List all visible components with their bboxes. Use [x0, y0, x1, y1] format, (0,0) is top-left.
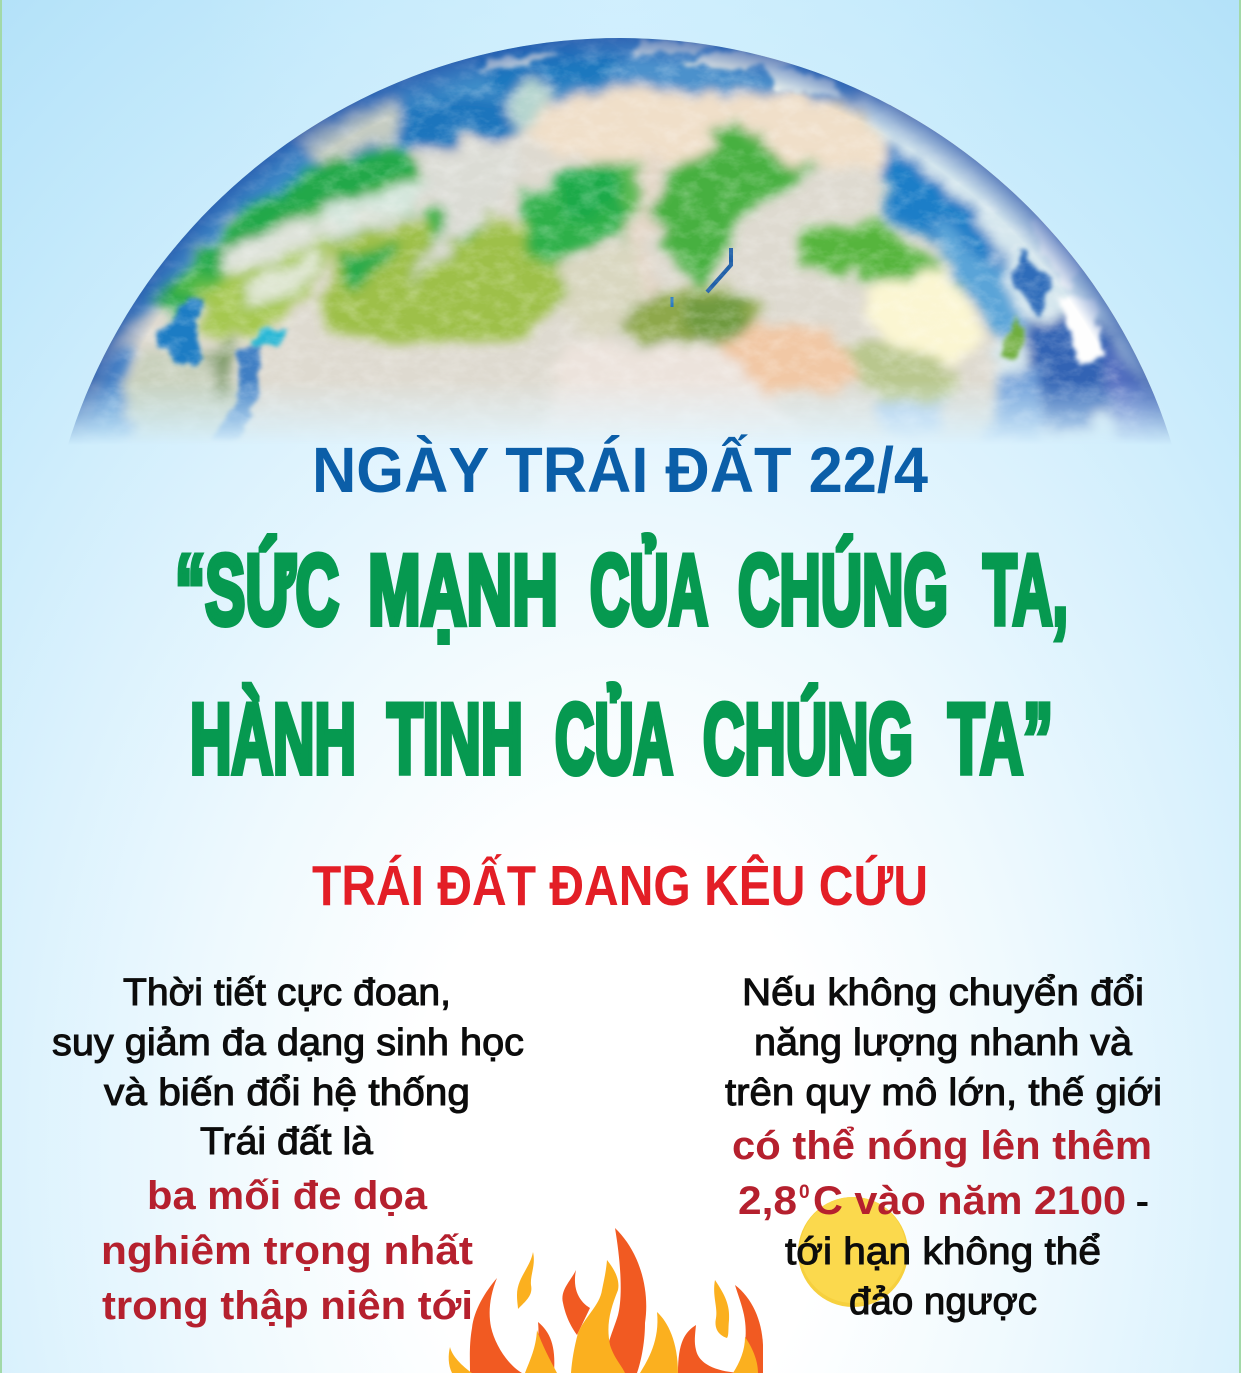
text block: left column: Thời tiết cực đoan,: [123, 972, 451, 1014]
title: slogan: “SỨC: [175, 534, 339, 645]
ocean and rim bands: [72, 38, 885, 434]
text block: left column: và biến đổi hệ thống: [104, 1072, 470, 1114]
text block: left column: [52, 972, 524, 1328]
title: slogan: CHÚNG: [738, 534, 948, 645]
text block: right column: năng lượng nhanh và: [754, 1022, 1133, 1064]
subheading: TRÁI ĐẤT ĐANG KÊU CỨU: [312, 853, 928, 918]
title: slogan: TINH: [387, 683, 523, 794]
text block: right column: C vào năm 2100: [813, 1179, 1126, 1223]
heading: date: NGÀY TRÁI ĐẤT 22/4: [312, 434, 928, 506]
lake: [707, 248, 731, 292]
globe illustration: [70, 38, 1170, 442]
seas and fine clouds: [156, 298, 205, 368]
right ocean and clouds: [856, 89, 1142, 426]
text block: left column: nghiêm trọng nhất: [101, 1229, 473, 1273]
title: slogan: TA,: [983, 534, 1068, 645]
text block: right column: có thể nóng lên thêm: [732, 1124, 1152, 1168]
icon: sun: [798, 1197, 908, 1307]
title: slogan: HÀNH: [190, 683, 356, 794]
title: slogan: TA”: [948, 683, 1053, 794]
desert and cream cloud: [700, 320, 870, 395]
peach and olive land at top: [530, 90, 885, 170]
text block: right column: 2,8: [738, 1179, 797, 1223]
text block: left column: trong thập niên tới: [102, 1284, 473, 1328]
title: slogan: MẠNH: [368, 534, 558, 645]
lower left land: [117, 348, 238, 422]
icon: flames: [449, 1228, 763, 1373]
text block: left column: ba mối đe dọa: [147, 1174, 428, 1218]
grey clouds on green: [220, 195, 400, 280]
title: slogan: CHÚNG: [703, 683, 913, 794]
text block: left column: suy giảm đa dạng sinh học: [52, 1022, 524, 1064]
text block: left column: Trái đất là: [200, 1121, 374, 1163]
text block: right column: -: [1136, 1181, 1149, 1223]
green land: [150, 150, 420, 320]
text block: right column: tới hạn không thể: [785, 1231, 1101, 1273]
text block: right column: [725, 972, 1162, 1323]
text block: right column: đảo ngược: [849, 1281, 1037, 1323]
title: slogan: CỦA: [555, 683, 673, 794]
title: slogan: CỦA: [590, 534, 708, 645]
title: slogan: [175, 534, 1068, 794]
text block: right column: trên quy mô lớn, thế giới: [725, 1072, 1162, 1114]
text block: right column: 0: [799, 1182, 810, 1203]
text block: right column: Nếu không chuyển đổi: [742, 972, 1144, 1014]
